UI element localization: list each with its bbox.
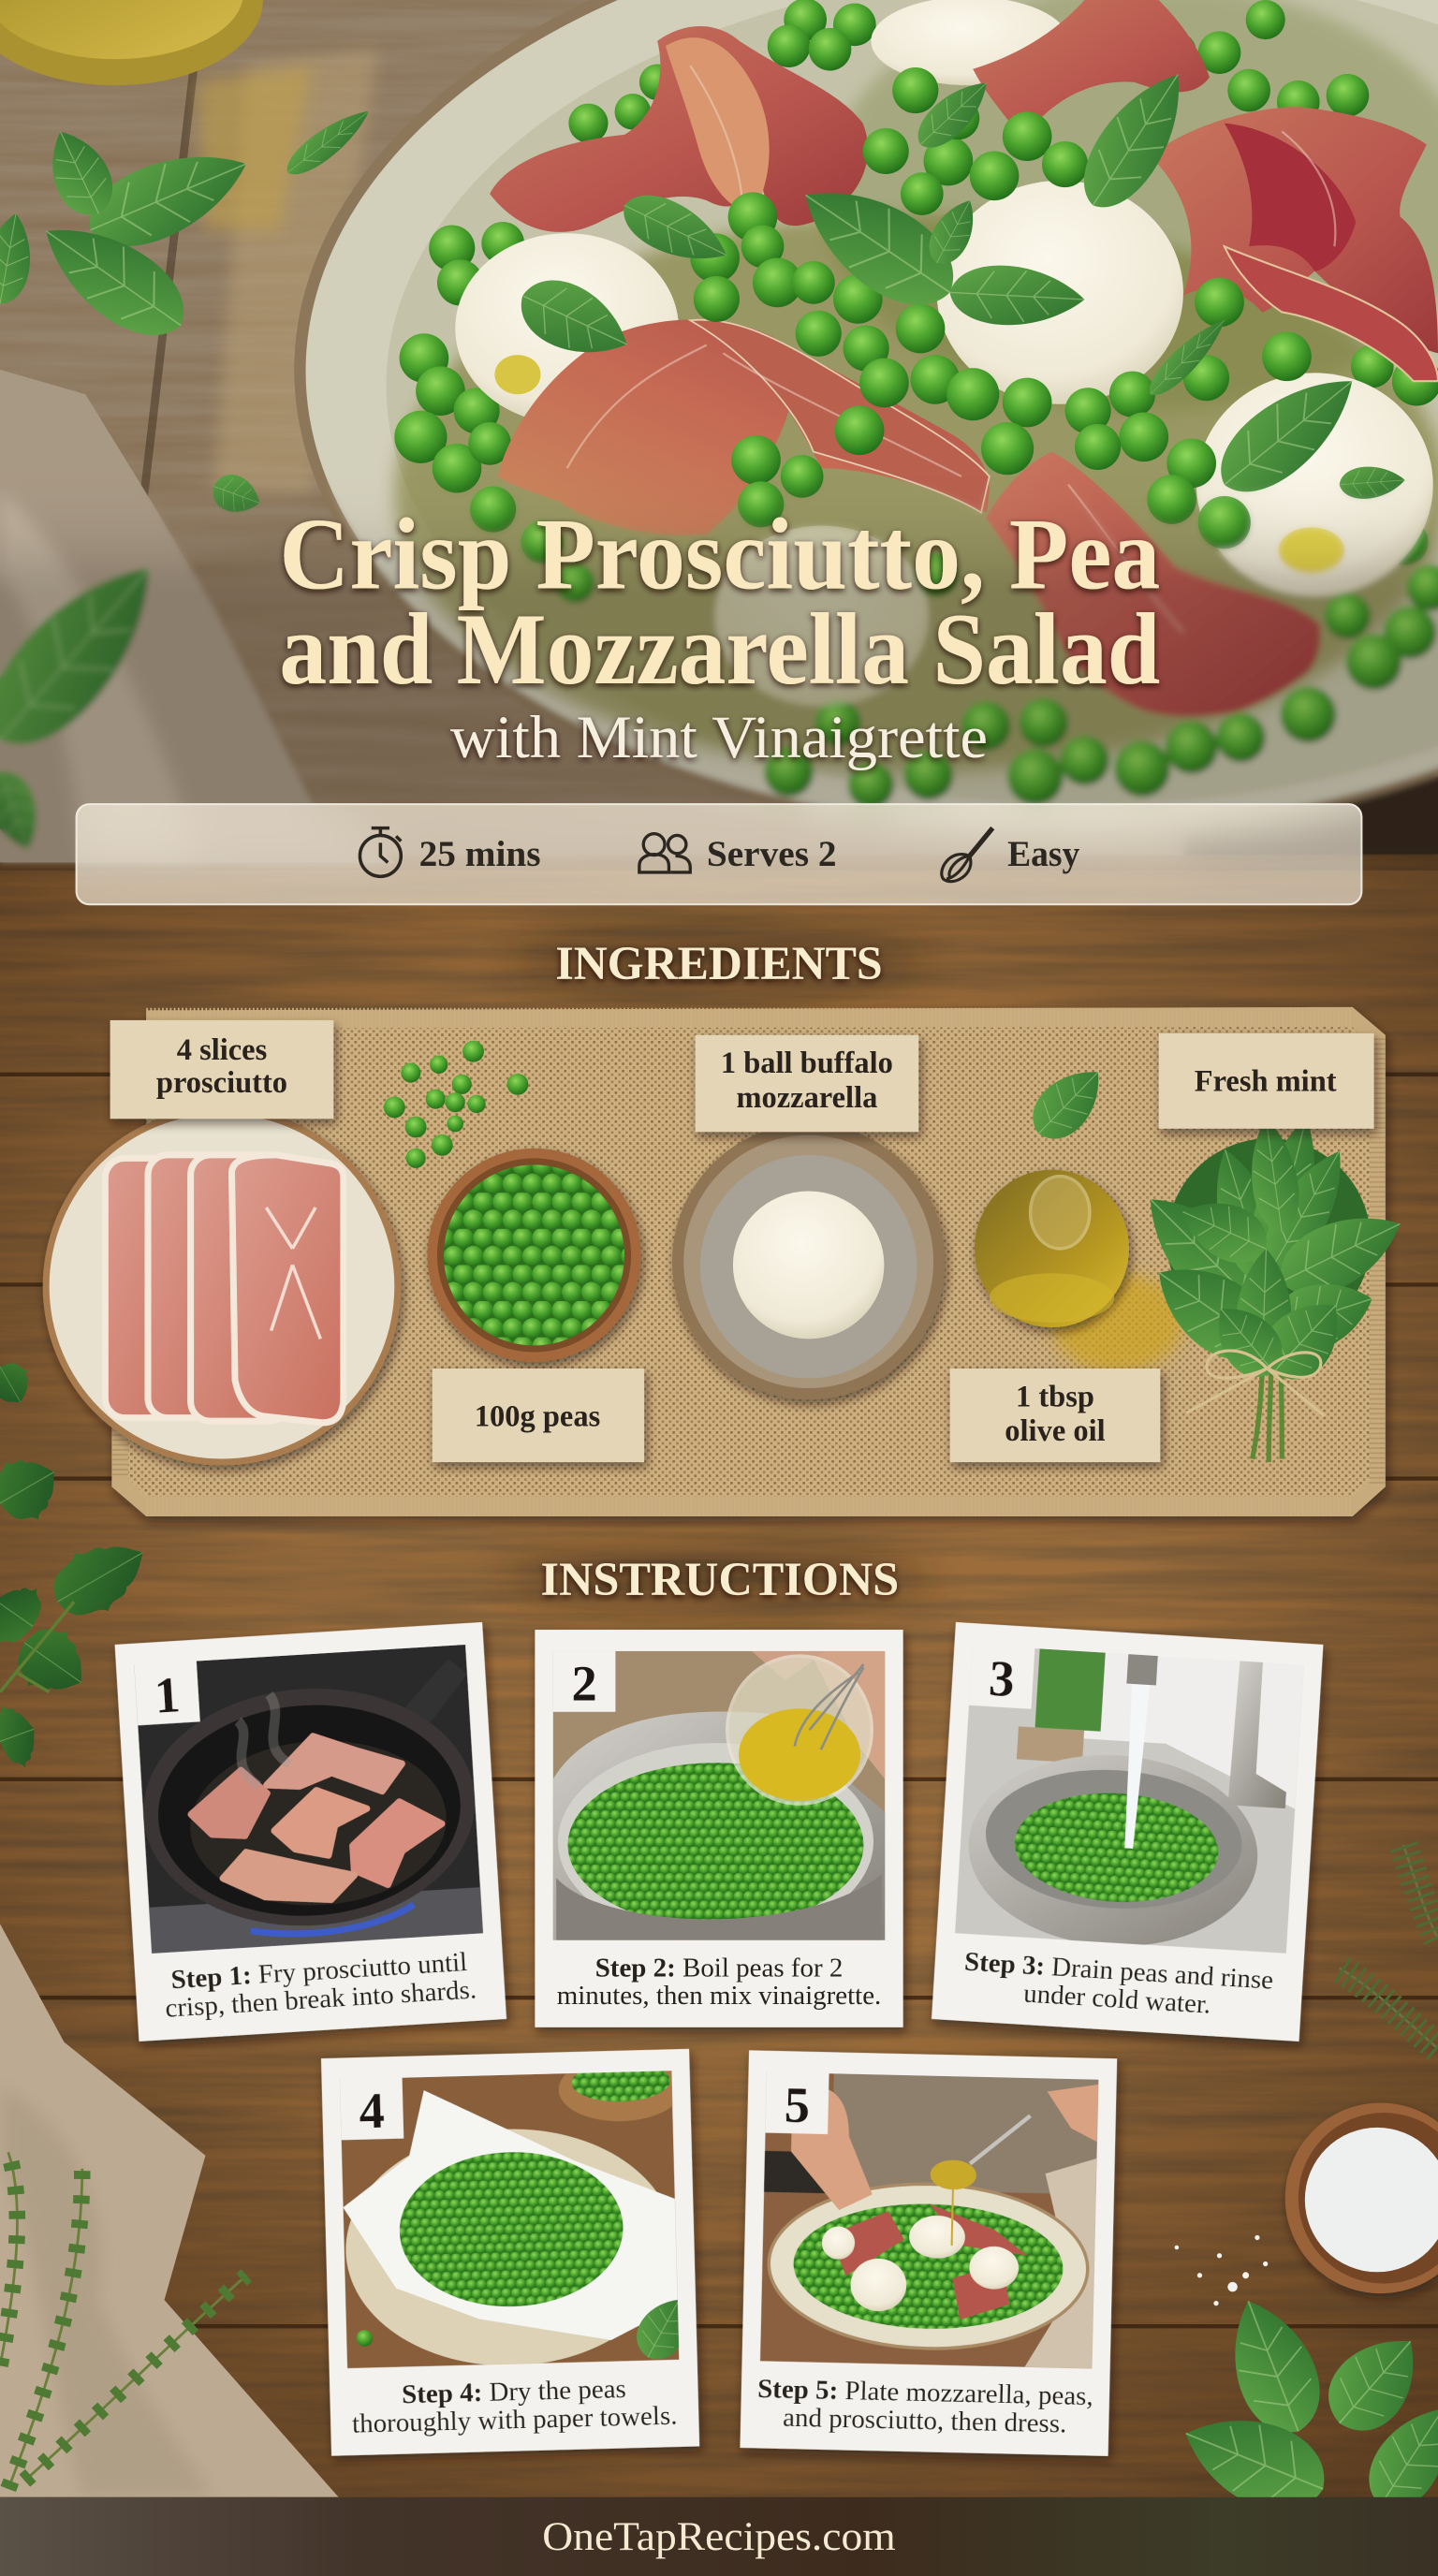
bowl of peas <box>427 1149 641 1362</box>
peas on top <box>690 67 1312 549</box>
caption: and prosciutto, then dress. <box>783 2402 1067 2438</box>
number tag <box>134 1661 200 1725</box>
label: mozzarella <box>696 1035 918 1132</box>
number tag: 5 <box>784 2077 811 2133</box>
label: mint <box>1159 1033 1374 1129</box>
scattered peas <box>384 1041 528 1168</box>
number tag <box>969 1645 1034 1709</box>
caption: Step 3: Drain peas and rinse <box>963 1947 1274 1996</box>
title <box>279 497 1160 706</box>
caption: Step 2: Boil peas for 2 <box>595 1953 843 1983</box>
panel: burlap ingredients mat <box>111 1007 1386 1516</box>
caption: thoroughly with paper towels. <box>352 2400 678 2439</box>
card: step 5 <box>740 2050 1117 2456</box>
label: olive oil: olive oil <box>1005 1414 1106 1448</box>
heading: ingredients: INGREDIENTS <box>555 938 883 990</box>
rosemary right <box>1340 1845 1438 2049</box>
parsley left <box>0 1355 160 1773</box>
label: mozzarella: 1 ball buffalo <box>721 1046 893 1080</box>
olive oil cruet <box>975 1170 1183 1372</box>
hero photo of the salad <box>0 0 1438 862</box>
card: step 3 <box>932 1622 1323 2042</box>
olive oil glass <box>0 0 313 230</box>
cloth napkin <box>0 370 394 862</box>
difficulty: Easy <box>1007 835 1079 874</box>
bowl of salt <box>1175 2103 1438 2305</box>
label: prosciutto <box>110 1020 333 1119</box>
label: peas: 100g peas <box>475 1399 600 1433</box>
label: mozzarella: mozzarella <box>736 1081 877 1115</box>
bowl of mozzarella <box>672 1123 945 1399</box>
subtitle: with Mint Vinaigrette <box>450 704 988 771</box>
prosciutto slices <box>490 0 1438 717</box>
label: prosciutto: prosciutto <box>156 1066 287 1100</box>
card: step 4 <box>321 2049 703 2456</box>
number tag <box>340 2078 404 2140</box>
mozzarella pieces <box>455 0 1433 707</box>
label: olive oil <box>950 1368 1160 1462</box>
number tag: 4 <box>359 2083 385 2140</box>
label: olive oil: 1 tbsp <box>1016 1380 1094 1413</box>
photo: draining peas <box>955 1645 1304 1956</box>
number tag <box>553 1651 615 1712</box>
footer band <box>0 2497 1438 2576</box>
salt flakes <box>1175 2235 1268 2305</box>
photo: frying prosciutto <box>134 1645 483 1954</box>
wooden table background <box>0 838 1438 2513</box>
servings: Serves 2 <box>707 835 837 874</box>
caption: Step 5: Plate mozzarella, peas, <box>757 2374 1093 2411</box>
prosciutto slices on the plate <box>105 1155 344 1423</box>
icon: whisk <box>942 828 992 882</box>
icon: people <box>639 834 690 872</box>
caption: Step 1: Fry prosciutto until <box>170 1947 468 1995</box>
small mint leaf <box>1020 1055 1116 1151</box>
number tag <box>765 2072 829 2134</box>
mint bunch with twine <box>1124 1111 1414 1462</box>
heading: instructions: INSTRUCTIONS <box>541 1554 899 1606</box>
label: prosciutto: 4 slices <box>177 1033 267 1067</box>
heading: ingredients <box>513 927 924 999</box>
mint leaves on the salad <box>509 57 1406 511</box>
photo: boiling peas and vinaigrette <box>553 1651 885 1940</box>
caption: Step 4: Dry the peas <box>402 2374 626 2409</box>
title: Crisp Prosciutto, Pea <box>279 497 1160 610</box>
photo: drying peas <box>339 2054 700 2377</box>
peas under the toppings <box>394 0 1438 809</box>
heading: instructions <box>505 1543 932 1615</box>
label: mint: Fresh mint <box>1195 1064 1337 1098</box>
caption: crisp, then break into shards. <box>165 1974 477 2024</box>
prosciutto plate <box>43 1107 401 1466</box>
thyme sprigs <box>0 2152 246 2489</box>
website: OneTapRecipes.com <box>542 2514 896 2559</box>
label: peas <box>433 1368 644 1462</box>
photo: plating <box>760 2072 1098 2368</box>
linen cloth bottom left <box>0 1924 339 2497</box>
mint bottom right <box>1170 2287 1438 2527</box>
number tag: 3 <box>988 1650 1016 1707</box>
caption: under cold water. <box>1022 1978 1211 2019</box>
caption: minutes, then mix vinaigrette. <box>557 1981 881 2011</box>
plate <box>294 0 1438 838</box>
number tag: 1 <box>153 1666 182 1724</box>
card: step 2 <box>535 1630 903 2027</box>
title: and Mozzarella Salad <box>279 593 1160 706</box>
prep time: 25 mins <box>419 835 541 874</box>
icon: stopwatch <box>360 828 401 876</box>
number tag: 2 <box>571 1656 597 1712</box>
frosted blur behind the title <box>0 483 1438 871</box>
oil sauce <box>394 213 1438 772</box>
frosted recipe info bar <box>75 803 1363 906</box>
card: step 1 <box>115 1622 506 2042</box>
mint on the table <box>0 100 377 857</box>
